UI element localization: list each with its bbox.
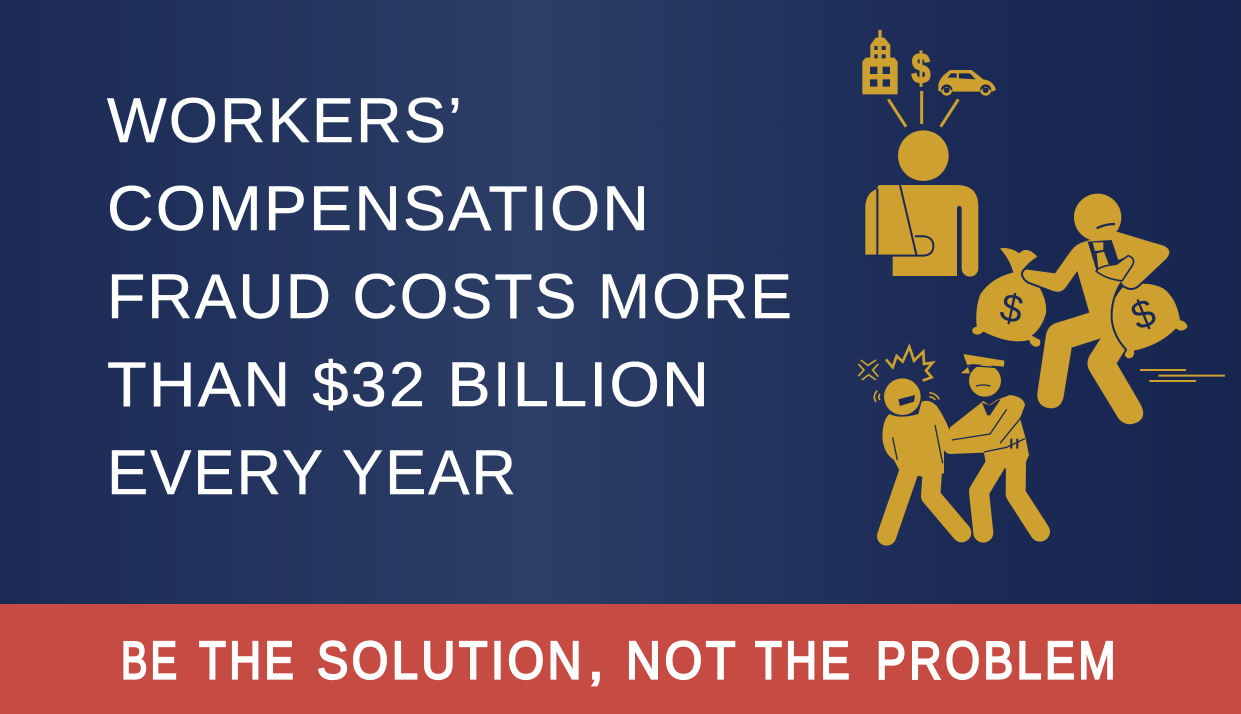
officer details xyxy=(982,399,1001,415)
officer hat xyxy=(961,354,1004,373)
man body xyxy=(1023,232,1169,424)
icon: police officer arresting man xyxy=(858,347,1040,536)
arrested man legs xyxy=(887,463,962,536)
speed lines xyxy=(1140,370,1225,381)
officer head xyxy=(969,365,1001,397)
mouth xyxy=(898,395,915,406)
footer slogan: THE xyxy=(755,632,853,690)
dollar on right bag: $ xyxy=(1125,290,1162,339)
footer slogan: , xyxy=(588,632,608,690)
title: WORKERS’ xyxy=(107,86,464,156)
thought lines xyxy=(888,91,958,127)
icon: car xyxy=(938,70,996,96)
officer mouth xyxy=(976,383,991,388)
spiky burst xyxy=(886,347,933,381)
head xyxy=(898,130,949,181)
body with sling xyxy=(865,185,978,277)
dollar on left bag: $ xyxy=(996,285,1027,332)
icon: dollar sign: $ xyxy=(911,45,931,93)
footer slogan: NOT xyxy=(626,632,739,690)
sling straps xyxy=(865,185,933,256)
icon: building xyxy=(862,30,898,94)
body lines xyxy=(893,425,943,463)
footer slogan: SOLUTION xyxy=(317,632,585,690)
tie and collar xyxy=(1088,240,1127,273)
belt buckle xyxy=(1011,439,1017,449)
title: FRAUD COSTS MORE xyxy=(107,262,794,332)
money bag right xyxy=(1109,284,1187,358)
anger mark xyxy=(858,360,878,380)
head xyxy=(1074,194,1121,241)
title: EVERY YEAR xyxy=(107,438,518,508)
arrested man head xyxy=(884,378,921,415)
footer slogan: PROBLEM xyxy=(876,632,1119,690)
title xyxy=(107,86,794,508)
mouth xyxy=(1097,224,1115,228)
icon: injured worker with thoughts of building, money and car xyxy=(862,30,996,96)
icon: fleeing man carrying money bags xyxy=(972,194,1225,424)
forearm xyxy=(1097,257,1133,280)
footer slogan: BE xyxy=(121,632,180,690)
footer slogan xyxy=(121,632,1119,690)
arrested man body xyxy=(882,401,953,477)
money bag left xyxy=(972,248,1046,347)
hat gap xyxy=(967,365,1004,368)
title: THAN $32 BILLION xyxy=(107,350,711,420)
officer legs xyxy=(979,463,1040,533)
shaking marks xyxy=(874,391,939,402)
title: COMPENSATION xyxy=(107,174,651,244)
footer slogan: THE xyxy=(199,632,297,690)
officer body xyxy=(945,395,1029,468)
footer banner xyxy=(0,604,1241,714)
